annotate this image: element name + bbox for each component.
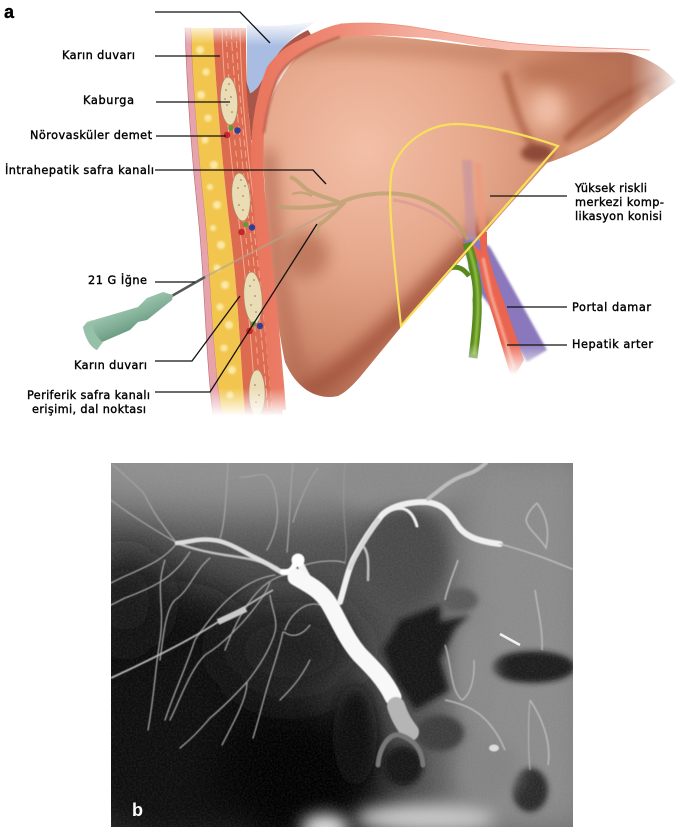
x-ray grain (111, 509, 573, 827)
leader lines (155, 12, 567, 392)
needle (83, 210, 333, 350)
label: Karın duvarı lower: Karın duvarı (74, 359, 147, 372)
liver (262, 36, 676, 397)
label: Yüksek riskli merkezi komplikasyon konisi: merkezi komp- (575, 196, 664, 209)
label: Hepatik arter: Hepatik arter (572, 338, 653, 351)
common bile duct x-ray (292, 554, 423, 765)
letter b: b (132, 800, 143, 820)
panel letter a: a (4, 2, 15, 22)
peripheral duct with contrast (111, 590, 273, 678)
liver capsule band (251, 23, 650, 410)
intrahepatic bile ducts (277, 177, 468, 240)
label: Yüksek riskli merkezi komplikasyon konisi (574, 182, 664, 223)
dark fold beside liver (246, 30, 312, 140)
label: İntrahepatik safra kanalı: İntrahepatik safra kanalı (5, 164, 154, 177)
label: Nörovasküler demet: Nörovasküler demet (30, 129, 153, 142)
neurovascular bundles (224, 125, 263, 334)
soft fades (175, 22, 555, 421)
label: Yüksek riskli merkezi komplikasyon konisi: Yüksek riskli (574, 182, 647, 195)
hepatic artery (462, 160, 524, 374)
label: Yüksek riskli merkezi komplikasyon konisi: likasyon konisi (575, 210, 662, 223)
label: Periferik safra kanalı erişimi, dal noktası (27, 389, 150, 416)
abdominal wall layers (185, 28, 283, 415)
common bile duct, green (450, 243, 478, 358)
label: 21 G İğne: 21 G İğne (88, 274, 147, 287)
label: Periferik safra kanalı erişimi, dal noktası: erişimi, dal noktası (32, 403, 146, 416)
blue wedge (247, 20, 320, 93)
biliary tree, fine branches (111, 463, 346, 748)
label: Kaburga: Kaburga (83, 94, 134, 107)
right hepatic ducts (177, 539, 296, 574)
vertebral and bowel details (445, 503, 549, 770)
label: Periferik safra kanalı erişimi, dal noktası: Periferik safra kanalı (27, 389, 150, 402)
surgical clip (500, 634, 520, 645)
label: Karın duvarı: Karın duvarı (62, 49, 135, 62)
small bright spot (489, 744, 499, 752)
panel b: cholangiogram x-ray (111, 463, 573, 827)
yellow cone (390, 124, 558, 326)
ribs (219, 77, 265, 416)
label: Portal damar: Portal damar (572, 301, 651, 314)
left hepatic duct (340, 463, 572, 602)
x-ray background (111, 463, 573, 827)
portal vein (464, 232, 547, 362)
panel a: anatomy illustration (83, 20, 676, 421)
